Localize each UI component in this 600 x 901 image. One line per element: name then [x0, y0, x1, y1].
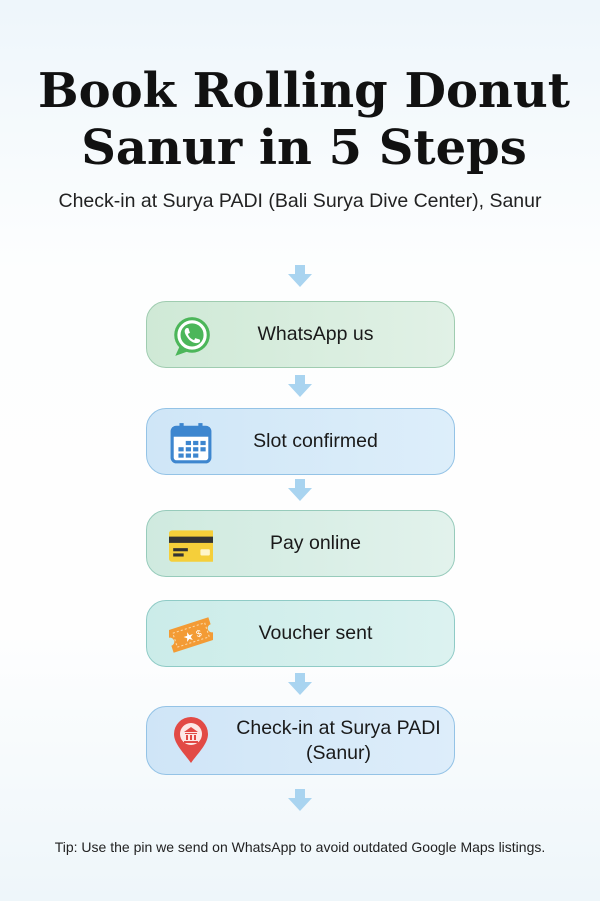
subtitle: Check-in at Surya PADI (Bali Surya Dive Center), Sanur: [58, 190, 542, 212]
arrow 1: [288, 265, 312, 287]
step 5: check-in: (Sanur): [306, 742, 371, 764]
icon: card: [169, 530, 213, 562]
step 1: WhatsApp: [146, 301, 455, 368]
arrow 3: [288, 479, 312, 501]
title: Book Rolling Donut: [38, 63, 570, 119]
step 3: pay online: Pay online: [270, 532, 361, 554]
step 4: voucher sent: [146, 600, 455, 667]
step 3: pay online: [146, 510, 455, 577]
arrow 6: [288, 789, 312, 811]
step 5: check-in: Check-in at Surya PADI: [236, 716, 441, 738]
icon: map pin: [174, 717, 208, 763]
step 5: check-in: [146, 706, 455, 775]
step 2: slot confirmed: Slot confirmed: [253, 430, 378, 452]
arrow 5: [288, 673, 312, 695]
step 1: WhatsApp: WhatsApp us: [258, 323, 373, 345]
title: Sanur in 5 Steps: [81, 120, 527, 176]
step 4: voucher sent: Voucher sent: [259, 622, 372, 644]
icon: voucher: [169, 617, 213, 653]
icon: voucher: $: [194, 627, 204, 639]
tip text: Tip: Use the pin we send on WhatsApp to avoid outdated Google Maps listings.: [55, 839, 545, 855]
arrow 2: [288, 375, 312, 397]
step 2: slot confirmed: [146, 408, 455, 475]
icon: whatsapp: [174, 317, 210, 356]
title: [38, 63, 570, 176]
icon: calendar: [170, 423, 212, 464]
icon: voucher: ★: [181, 629, 196, 645]
